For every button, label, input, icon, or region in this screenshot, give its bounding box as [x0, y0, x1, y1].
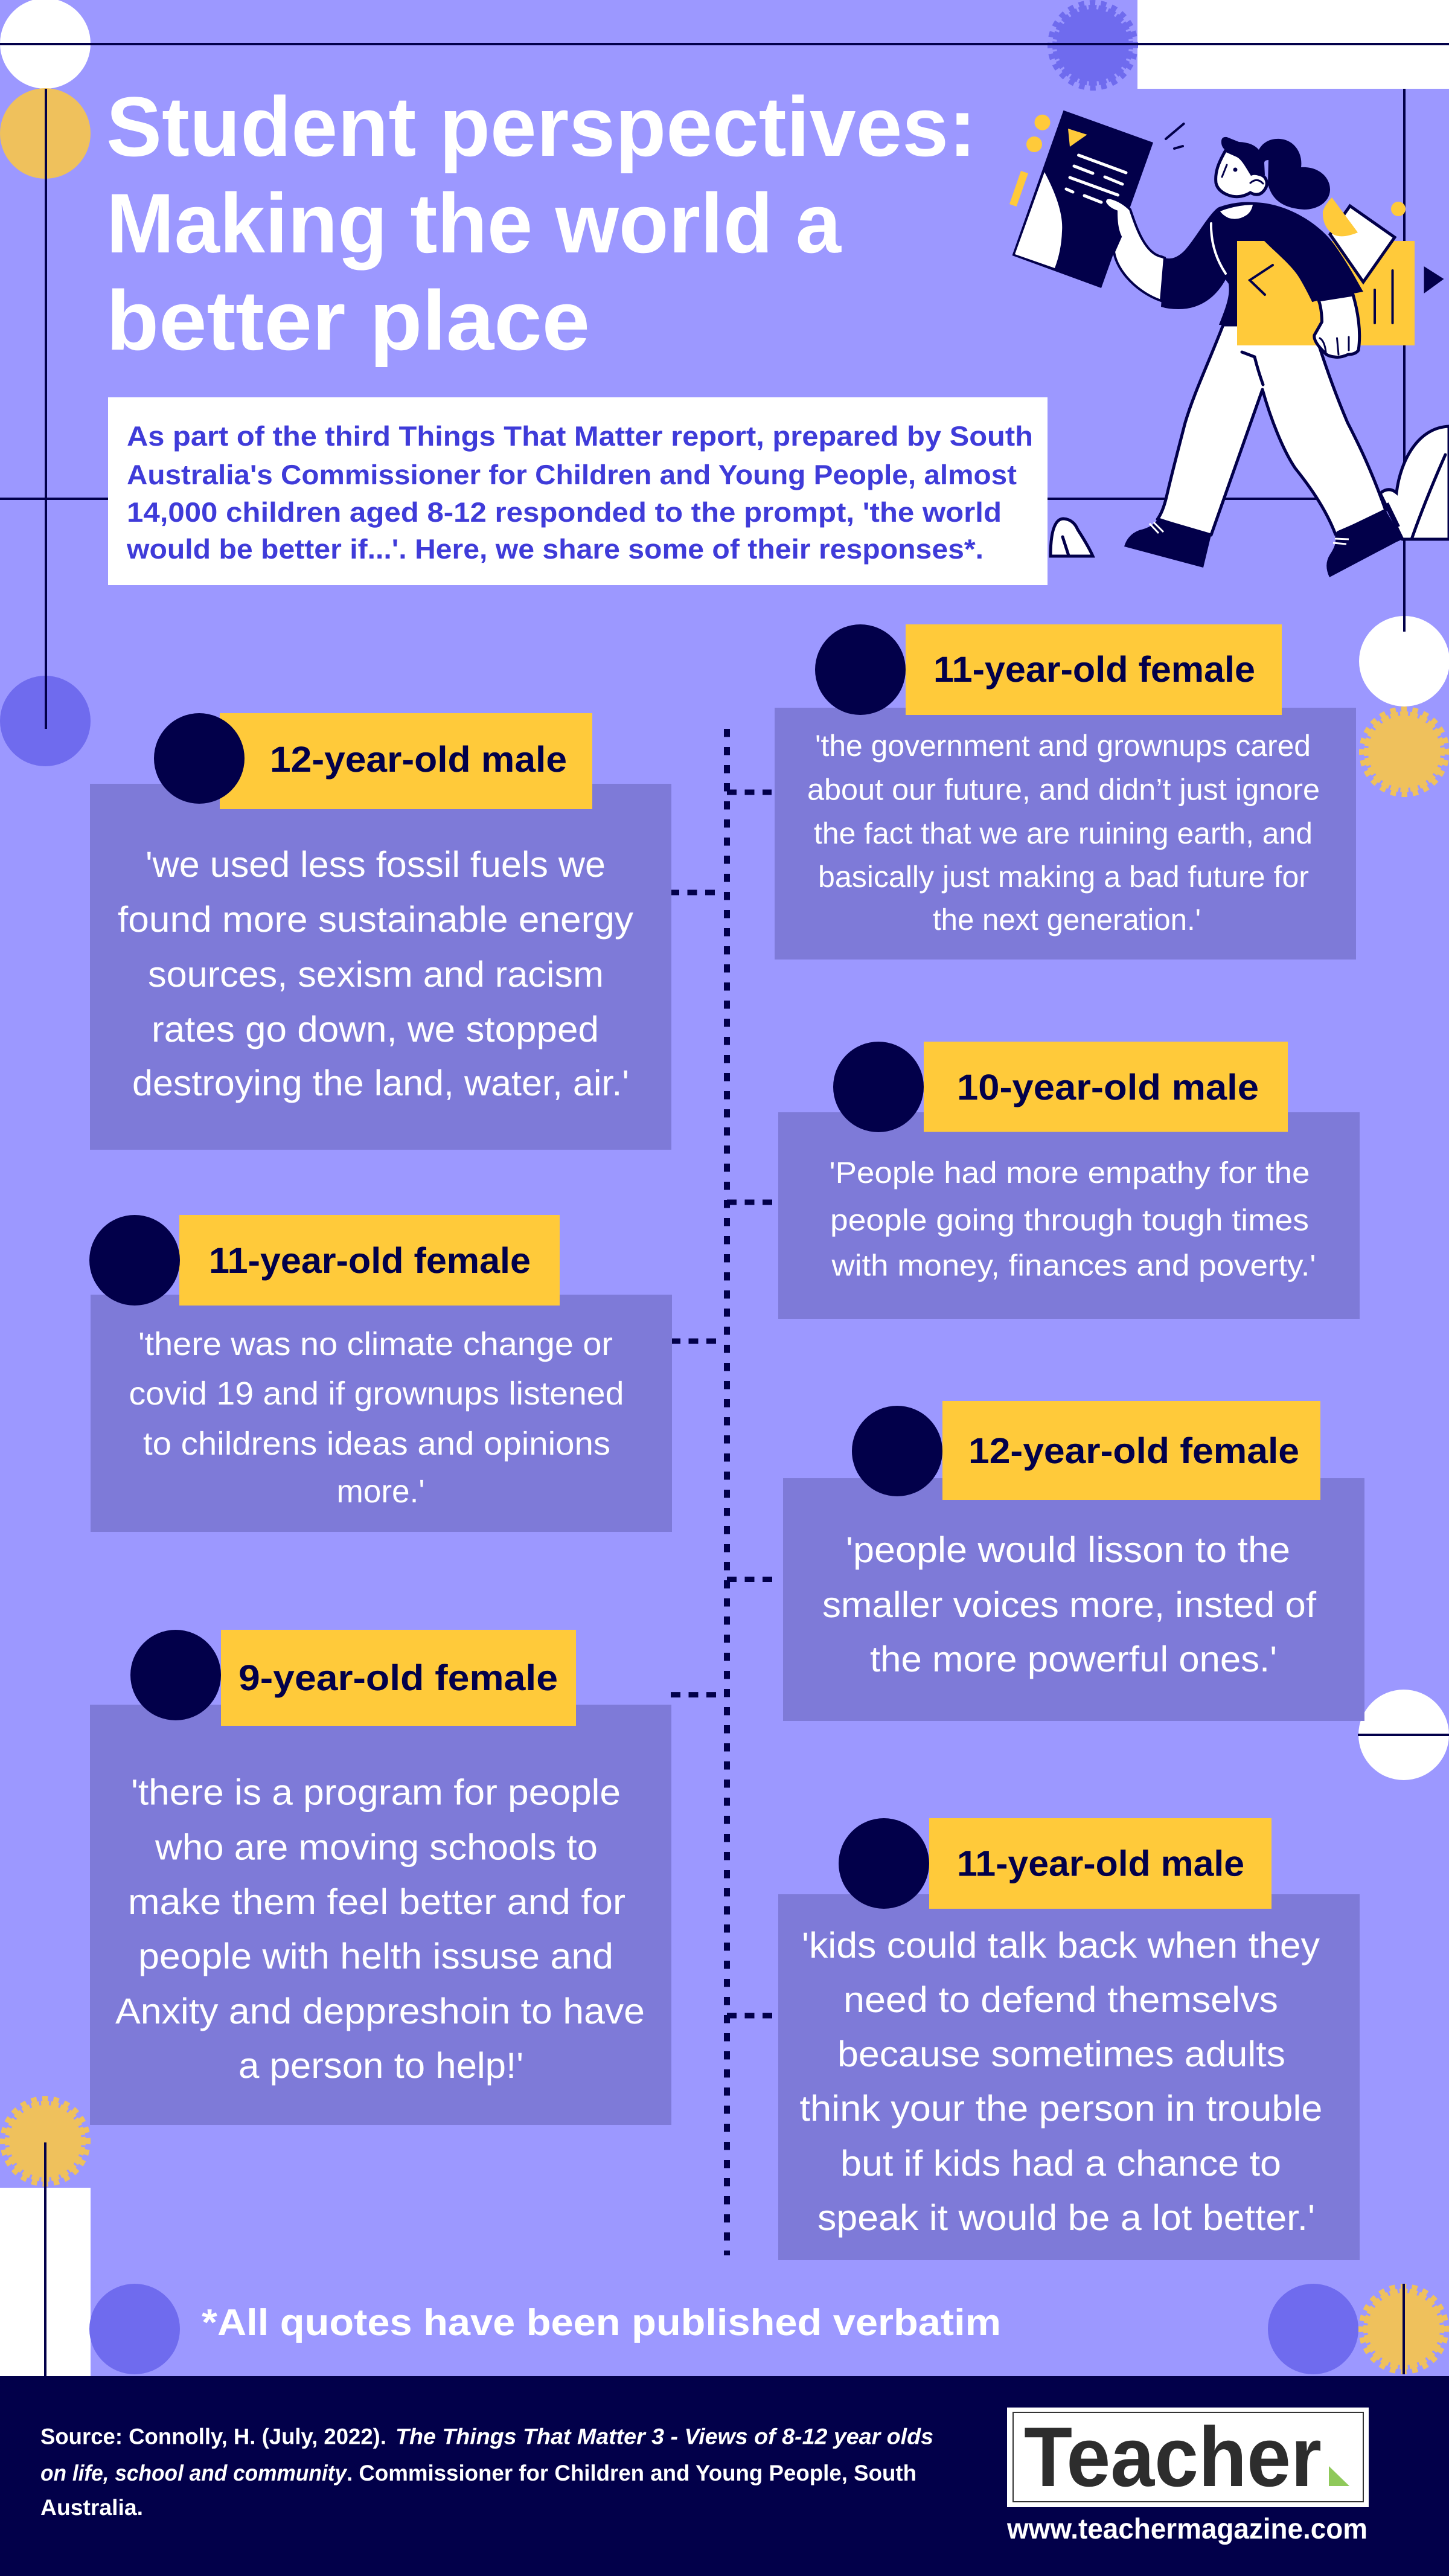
panel: 11-year-old female (left): more.': [337, 1473, 425, 1510]
panel: 9-year-old female: people with helth issuse and: [138, 1936, 613, 1976]
footnote: *All quotes have been published verbatim: [202, 2302, 1001, 2344]
gear: yellow lower left: [3, 2099, 88, 2184]
yellow folder front: [1237, 241, 1392, 345]
panel: 11-year-old male: need to defend themselvs: [843, 1979, 1278, 2020]
back document: [1330, 206, 1395, 282]
panel: 10-year-old male: [778, 1042, 1360, 1319]
panel: 10-year-old male: 10-year-old male: [957, 1067, 1259, 1107]
decorative circles and gears: top left: [0, 0, 91, 179]
white block top right: [1137, 0, 1449, 89]
intro text box: would be better if...'. Here, we share some of their responses*.: [126, 533, 984, 565]
panel: 12-year-old female: smaller voices more, insted of: [822, 1584, 1316, 1625]
panel: 11-year-old female (right): the next generation.': [933, 903, 1201, 937]
panel: 9-year-old female: who are moving schools to: [155, 1827, 598, 1867]
timeline: dotted centre line with branches: [670, 729, 776, 2255]
circle: blue bottom left: [89, 2284, 180, 2374]
panel: 12-year-old male: destroying the land, water, air.': [132, 1063, 629, 1103]
panel: 9-year-old female: a person to help!': [238, 2045, 523, 2086]
panel: 11-year-old male: but if kids had a chance to: [840, 2143, 1281, 2184]
panel: 12-year-old male: 'we used less fossil fuels we: [146, 844, 606, 885]
intro text box: As part of the third Things That Matter report, prepared by South: [127, 420, 1033, 452]
circle: blue left: [0, 676, 91, 766]
panel: 12-year-old male: [90, 713, 671, 1150]
panel: 11-year-old female (right): the fact that we are ruining earth, and: [814, 816, 1313, 850]
yellow folder: [1237, 241, 1415, 345]
circle: white lower right: [1358, 1690, 1449, 1780]
panel: 11-year-old female (right): [775, 624, 1356, 960]
shoe: right: [1326, 510, 1403, 577]
panel: 11-year-old female (left): to childrens ideas and opinions: [143, 1426, 610, 1462]
panel: 11-year-old female (right): 11-year-old female: [933, 649, 1255, 690]
gear: yellow bottom right: [1361, 2287, 1446, 2371]
icon: small hill: [1051, 519, 1093, 556]
pants: [1157, 325, 1386, 535]
panel: 12-year-old female: [783, 1401, 1364, 1721]
panel: 10-year-old male: people going through tough times: [830, 1203, 1309, 1237]
panel: 12-year-old male: sources, sexism and racism: [148, 954, 604, 995]
document in hand: [1012, 111, 1153, 288]
panel: 11-year-old male: because sometimes adults: [837, 2034, 1285, 2074]
title: Making the world a: [106, 176, 842, 271]
panel: 11-year-old female (left): 'there was no climate change or: [138, 1326, 613, 1362]
panel: 9-year-old female: Anxity and deppreshoin to have: [115, 1991, 645, 2031]
head and hair: [1216, 137, 1330, 210]
panel: 11-year-old male: [778, 1818, 1360, 2260]
source citation: . Commissioner for Children and Young People, South: [347, 2461, 916, 2485]
illustration: woman walking with document: [1009, 111, 1449, 577]
source citation: [40, 2424, 933, 2520]
panel: 9-year-old female: [90, 1630, 671, 2125]
source citation: Source: Connolly, H. (July, 2022).: [40, 2424, 386, 2449]
panel: 11-year-old male: speak it would be a lot better.': [817, 2197, 1315, 2238]
accent shapes around figure: [1009, 115, 1444, 293]
panel: 10-year-old male: with money, finances and poverty.': [831, 1249, 1316, 1283]
intro text box: [108, 397, 1048, 585]
right arm and fist: [1314, 295, 1360, 357]
Teacher logo: Teacher: [1024, 2409, 1322, 2504]
source citation: The Things That Matter 3 - Views of 8-12 year olds: [395, 2424, 933, 2449]
panel: 11-year-old male: think your the person in trouble: [799, 2088, 1322, 2129]
footer band: [0, 2376, 1449, 2576]
gear: blue top: [1051, 3, 1135, 88]
title: Student perspectives:: [106, 79, 976, 174]
panel: 11-year-old female (left): [89, 1215, 672, 1532]
white block lower left: [0, 2188, 91, 2376]
shirt: [1161, 202, 1363, 325]
panel: 11-year-old female (right): 'the government and grownups cared: [815, 729, 1311, 763]
source citation: on life, school and community: [40, 2461, 348, 2485]
circle: blue bottom right: [1268, 2284, 1358, 2374]
intro text box: 14,000 children aged 8-12 responded to the prompt, 'the world: [127, 496, 1002, 528]
panel: 10-year-old male: 'People had more empathy for the: [830, 1156, 1310, 1190]
panel: 12-year-old female: 12-year-old female: [968, 1431, 1299, 1471]
yellow wedge shape: [1323, 197, 1358, 236]
panel: 9-year-old female: make them feel better and for: [128, 1882, 625, 1922]
panel: 11-year-old female (right): about our future, and didn’t just ignore: [807, 773, 1320, 807]
gear: yellow right: [1362, 710, 1447, 794]
left arm and hand: [1105, 198, 1165, 301]
panel: 9-year-old female: 9-year-old female: [238, 1658, 558, 1698]
shoe: left: [1124, 518, 1211, 568]
panel: 12-year-old male: found more sustainable energy: [118, 899, 633, 940]
intro text box: Australia's Commissioner for Children and Young People, almost: [127, 459, 1017, 490]
panel: 11-year-old male: 'kids could talk back when they: [802, 1925, 1320, 1966]
title: [106, 79, 976, 368]
source citation: Australia.: [40, 2495, 143, 2520]
panel: 12-year-old male: rates go down, we stopped: [152, 1009, 599, 1049]
panel: 11-year-old female (left): 11-year-old female: [209, 1240, 531, 1281]
panel: 11-year-old female (left): covid 19 and if grownups listened: [129, 1376, 624, 1412]
circle: white right: [1359, 616, 1449, 706]
panel: 9-year-old female: 'there is a program for people: [131, 1772, 621, 1813]
panel: 11-year-old male: 11-year-old male: [957, 1843, 1244, 1884]
panel: 12-year-old male: 12-year-old male: [270, 739, 567, 780]
panel: 11-year-old female (right): basically just making a bad future for: [818, 860, 1309, 894]
title: better place: [106, 273, 590, 368]
icon: large hill: [1380, 426, 1449, 539]
panel: 12-year-old female: the more powerful ones.': [870, 1639, 1277, 1679]
panel: 12-year-old female: 'people would lisson to the: [846, 1530, 1290, 1570]
website url: www.teachermagazine.com: [1006, 2513, 1367, 2545]
